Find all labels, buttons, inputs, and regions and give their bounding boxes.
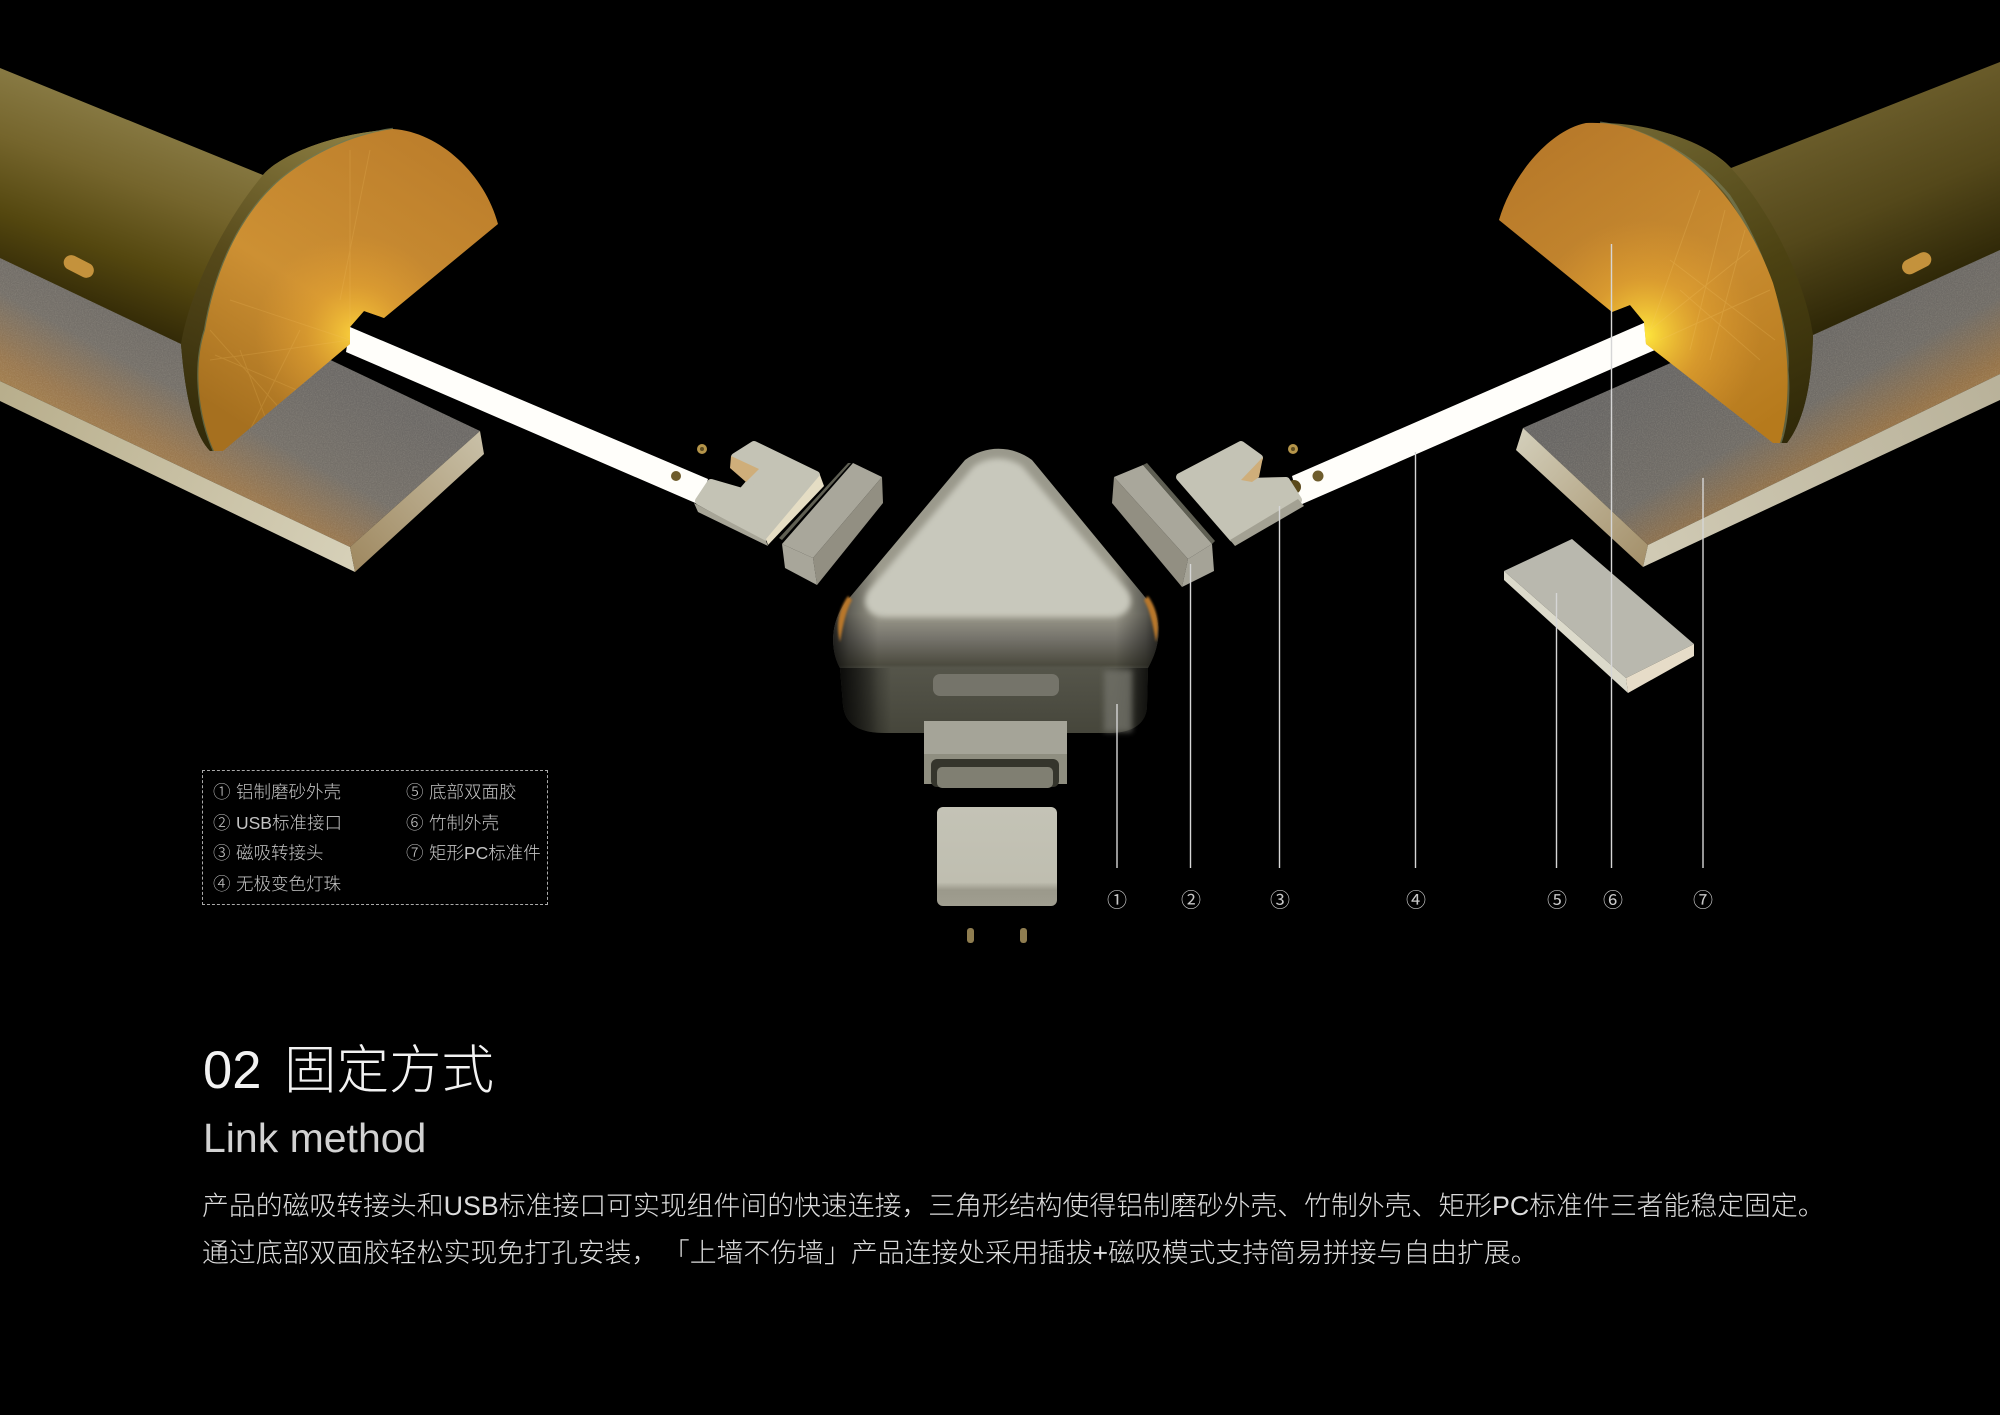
bottom screws xyxy=(967,928,1027,943)
left magnetic adapter xyxy=(694,445,824,546)
number labels: ④ xyxy=(1406,889,1426,912)
left aluminium tube xyxy=(0,68,393,451)
right plate: rectangular PC standard part xyxy=(1516,218,2000,567)
body paragraph xyxy=(202,1191,1825,1268)
triangular connector hub xyxy=(830,440,1165,740)
hub slot xyxy=(933,674,1059,696)
right aluminium tube xyxy=(1600,62,2000,443)
base cap tile xyxy=(937,807,1057,906)
legend item 1: 铝制磨砂外壳 xyxy=(236,782,341,802)
right USB bar xyxy=(1112,463,1215,587)
legend item 1: ① xyxy=(213,782,230,802)
legend item 7: 矩形PC标准件 xyxy=(429,843,541,863)
legend item 6: 竹制外壳 xyxy=(429,813,499,833)
legend item 5: ⑤ xyxy=(406,782,424,802)
leader lines xyxy=(1117,244,1703,868)
number labels: ⑤ xyxy=(1547,889,1567,912)
legend item 4: 无极变色灯珠 xyxy=(236,874,341,894)
USB connector piece xyxy=(924,721,1067,788)
legend item 2: USB标准接口 xyxy=(236,813,342,833)
legend item 4: ④ xyxy=(213,874,230,894)
legend item 3: ③ xyxy=(213,843,230,863)
illustration: exploded view of the lamp connector xyxy=(0,62,2000,943)
number labels xyxy=(1107,889,1713,912)
number labels: ③ xyxy=(1270,889,1290,912)
left bamboo face xyxy=(198,129,498,451)
left plate: rectangular PC standard part xyxy=(0,203,484,572)
legend item 2: ② xyxy=(213,813,230,833)
number labels: ① xyxy=(1107,889,1127,912)
left strip screw xyxy=(671,444,707,481)
right bamboo face xyxy=(1499,123,1788,443)
right strip screw xyxy=(1287,444,1324,494)
legend item 6: ⑥ xyxy=(406,813,424,833)
right LED strip xyxy=(1292,322,1655,505)
left LED strip xyxy=(346,327,708,505)
number labels: ⑦ xyxy=(1693,889,1713,912)
legend box xyxy=(202,770,548,905)
legend item 3: 磁吸转接头 xyxy=(236,843,324,863)
left USB bar xyxy=(779,463,883,585)
body paragraph: 通过底部双面胶轻松实现免打孔安装， 「上墙不伤墙」产品连接处采用插拔+磁吸模式支持简易拼接与自由扩展。 xyxy=(202,1238,1538,1268)
adhesive strip xyxy=(1504,539,1694,693)
subtitle: Link method xyxy=(203,1115,426,1161)
right magnetic adapter xyxy=(1180,445,1304,546)
body paragraph: 产品的磁吸转接头和USB标准接口可实现组件间的快速连接，三角形结构使得铝制磨砂外壳、竹制外壳、矩形PC标准件三者能稳定固定。 xyxy=(202,1191,1825,1221)
title: 02 固定方式 xyxy=(203,1041,494,1100)
number labels: ⑥ xyxy=(1603,889,1623,912)
legend item 7: ⑦ xyxy=(406,843,424,863)
legend item 5: 底部双面胶 xyxy=(429,782,516,802)
number labels: ② xyxy=(1181,889,1201,912)
